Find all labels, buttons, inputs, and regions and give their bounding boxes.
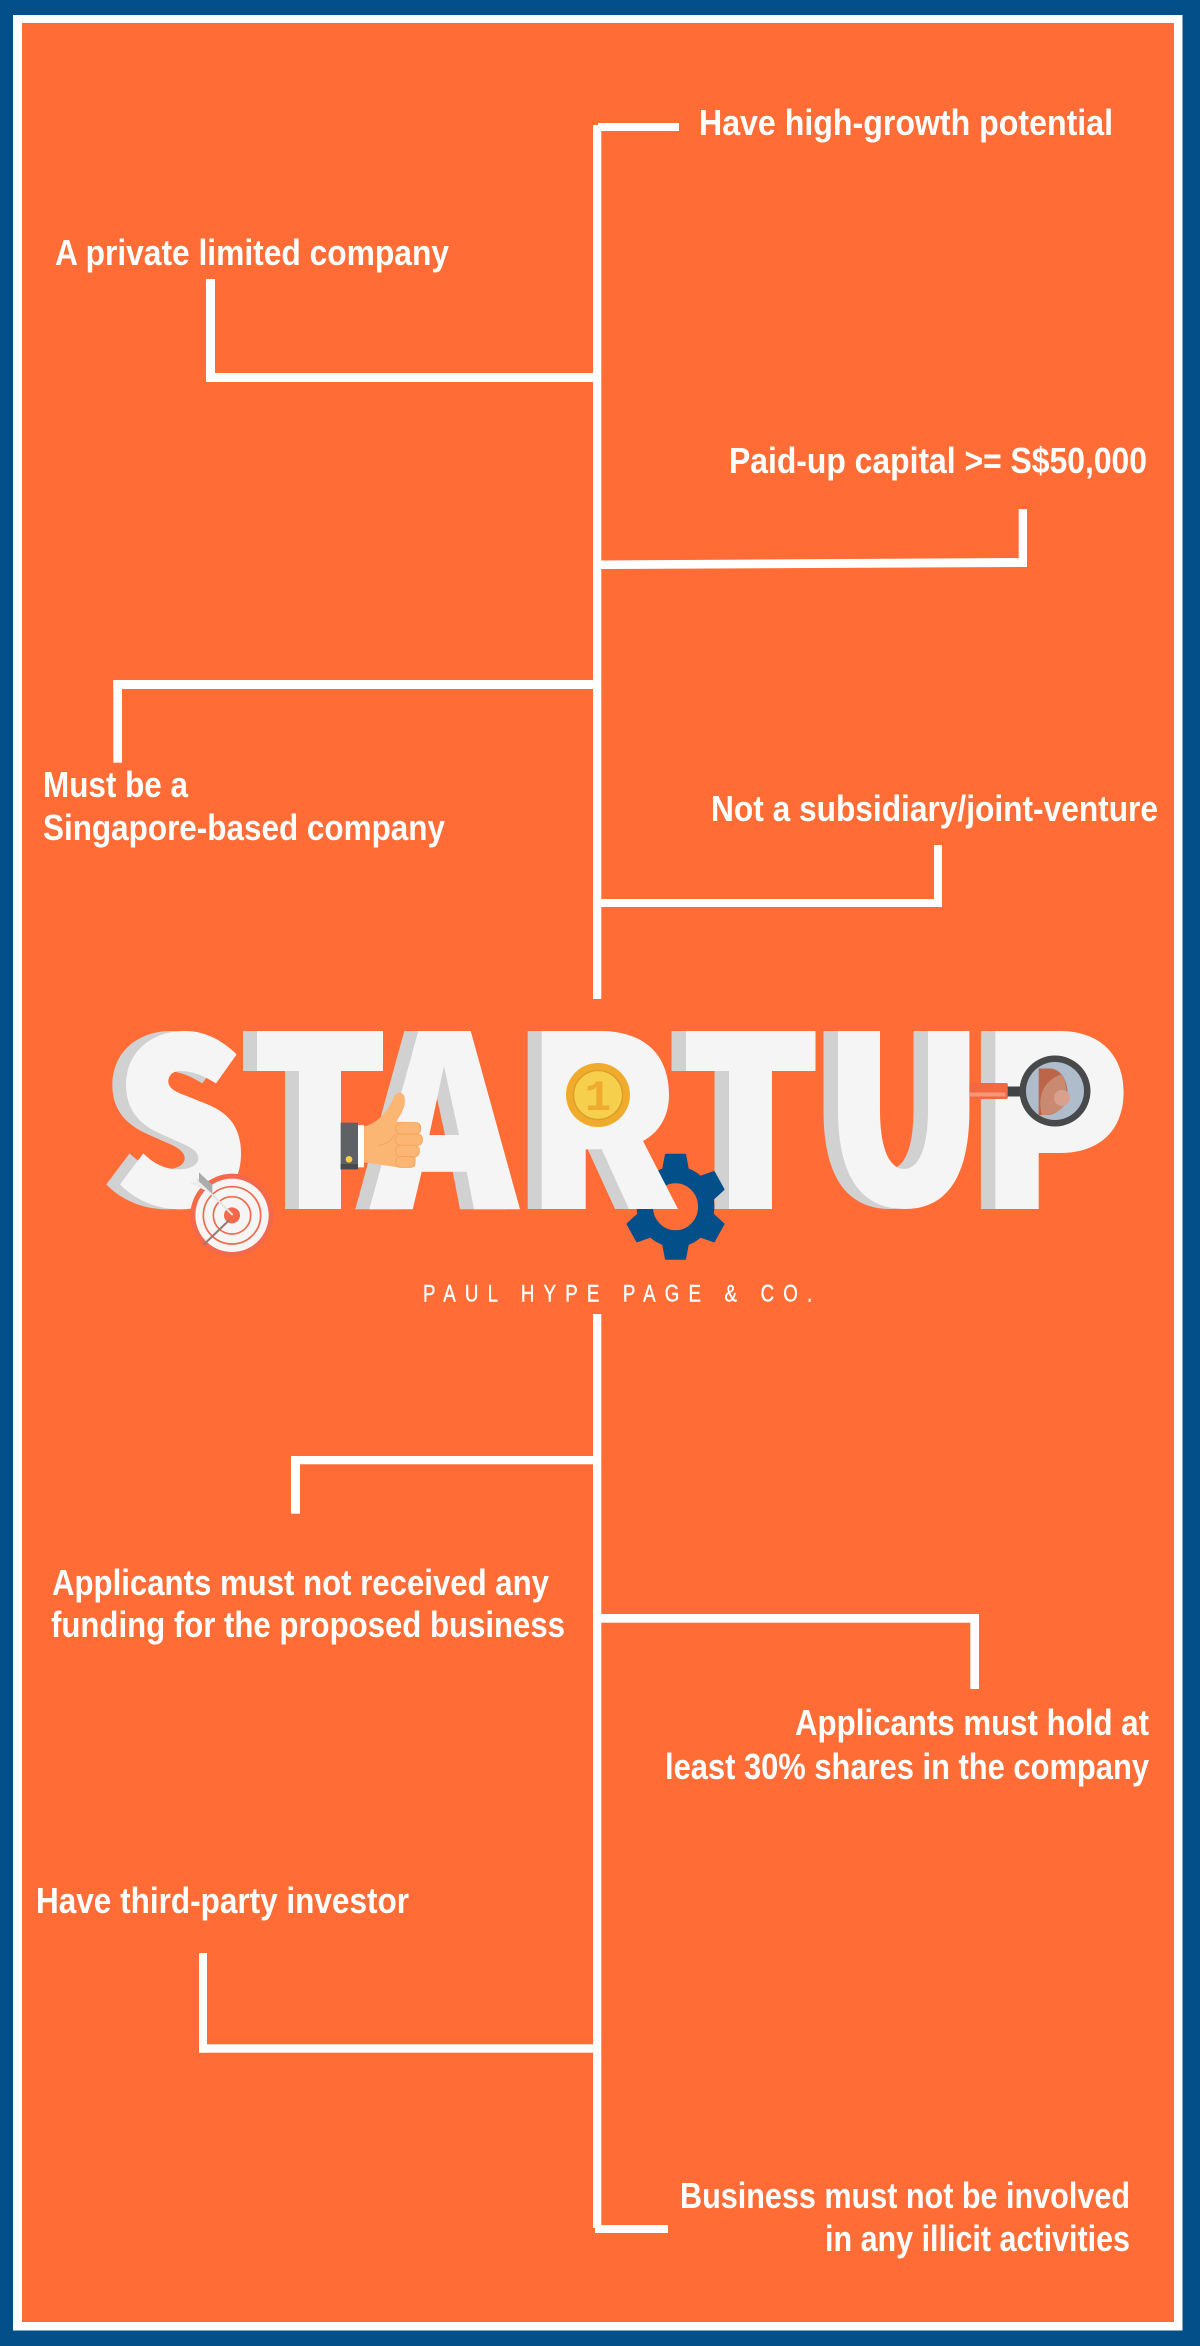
icon: gear [626,1155,725,1259]
letter P [981,1031,1124,1209]
icon: magnifying glass [969,1056,1090,1126]
letter S [106,1031,241,1209]
text: singapore-based company: Must be a [43,764,189,805]
lower connector tree [199,1314,979,2233]
text: no illicit activities [680,2175,1130,2259]
text: paid-up capital: Paid-up capital >= S$50,000 [729,440,1147,481]
letter A [355,1031,520,1209]
text: no funding received: funding for the proposed business [51,1604,565,1645]
text: no funding received [51,1562,565,1645]
text: have high-growth potential: Have high-growth potential [699,102,1113,143]
icon: gold coin: 1 [585,1074,611,1124]
text: have third-party investor: Have third-party investor [36,1880,409,1921]
icon: target with arrow [189,1172,274,1257]
icon: thumbs-up hand [341,1093,422,1169]
letter R [528,1031,678,1209]
text: no illicit activities: in any illicit activities [825,2218,1130,2259]
STARTUP lettering with icons [106,1031,1124,1259]
company name: PAUL HYPE PAGE & CO. [423,1280,812,1307]
text: no illicit activities: Business must not be involved [680,2175,1130,2216]
letter U [824,1031,969,1209]
text: singapore-based company [43,764,445,848]
text: hold 30% shares: Applicants must hold at [795,1702,1149,1743]
text: no funding received: Applicants must not received any [52,1562,549,1603]
upper connector tree [113,123,1027,999]
text: a private limited company: A private limited company [55,232,449,273]
letter T [243,1031,383,1209]
text: hold 30% shares [665,1702,1149,1787]
second letter T [672,1031,816,1209]
icon: gold coin [566,1063,630,1127]
text: singapore-based company: Singapore-based company [43,807,445,848]
